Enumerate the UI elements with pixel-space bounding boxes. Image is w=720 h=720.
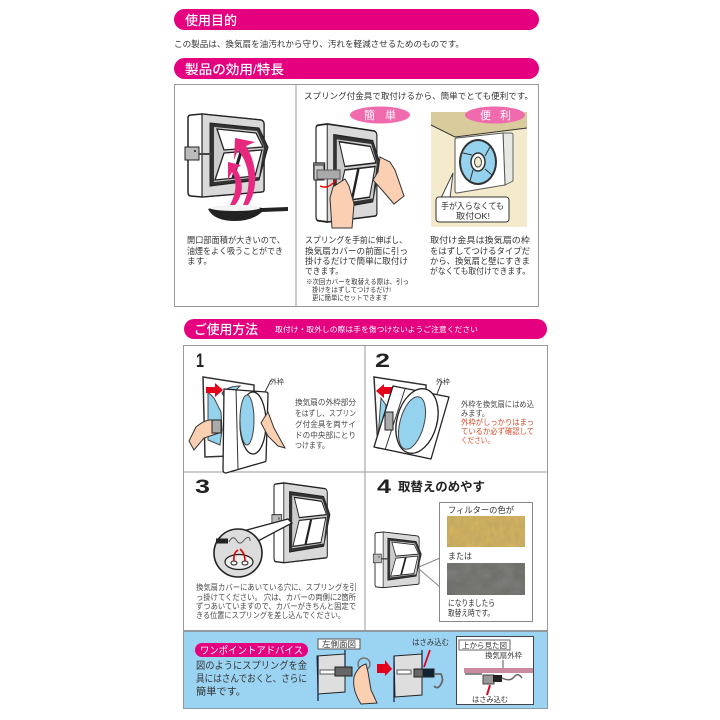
text: or: または	[448, 551, 472, 561]
panel: filter color guide	[440, 502, 532, 622]
icon: hood fan with rising smoke over a frying pan	[185, 114, 288, 221]
step 4	[373, 477, 532, 622]
label: outer frame: 外枠	[436, 377, 450, 386]
text: step 2 instruction: ください。	[461, 436, 494, 445]
text: easy caption: できます。	[305, 266, 343, 276]
text: step 3 instruction: っ掛けてください。 穴は、カバーの両側に2箇所	[196, 592, 356, 602]
step 2	[374, 351, 534, 459]
text: easy caption	[305, 234, 409, 302]
text: callout: 手が入らなくても	[441, 200, 504, 211]
illustration: fan hood with leader lines	[373, 532, 440, 588]
step 4 heading: 4	[377, 477, 392, 498]
text: replacement time	[448, 598, 495, 618]
badge: one-point advice: ワンポイントアドバイス	[200, 645, 303, 657]
label: left side view: 左側面図	[322, 639, 356, 649]
badge: easy: 簡単	[364, 108, 396, 122]
label: left side view	[318, 639, 360, 649]
text: filter color: フィルターの色が	[448, 504, 514, 515]
illustration: hooking the spring into the cover holes	[214, 483, 330, 577]
text: convenient caption: 取付け金具は換気扇の枠	[430, 234, 530, 245]
heading: effects and features	[174, 58, 539, 79]
heading: how to use	[184, 319, 547, 339]
heading: purpose: 使用目的	[185, 13, 237, 28]
text: step 2 instruction: みます。	[461, 409, 489, 418]
heading: how to use: ご使用方法	[194, 322, 258, 337]
text: easy caption: スプリングを手前に伸ばし、	[305, 234, 407, 245]
text: step 1 instruction: 換気扇の外枠部分	[295, 397, 356, 407]
text: replacement time: になりましたら	[448, 598, 495, 608]
text: opening area caption: 開口部面積が大きいので、	[187, 234, 285, 245]
illustration: right side view, spring clamped	[394, 650, 442, 702]
text: easy caption: 換気扇カバーの前面に引っ	[305, 245, 408, 256]
step number 3: 3	[195, 477, 210, 498]
text: convenient caption	[430, 234, 530, 276]
label: clamp: はさみ込む	[472, 695, 508, 704]
text: convenient caption: をはずしてつけるタイプだ	[430, 246, 530, 256]
step 1	[189, 351, 356, 473]
text: advice: 具にはさんでおくと、さらに	[196, 673, 307, 685]
step 4 heading: 取替えのめやす	[398, 479, 485, 494]
label: view from above: 上から見た図	[462, 641, 507, 650]
text: step 1 instruction: ドの中央部にとり	[295, 430, 356, 440]
text: convenient caption: がなくても取付けできます。	[430, 265, 530, 276]
step 3	[195, 477, 357, 620]
label: clamp: はさみ込む	[412, 638, 449, 647]
text: advice: 簡単です。	[196, 685, 246, 698]
text: step 1 instruction: グ付金具を両サイ	[295, 419, 356, 429]
illustration: fan mounted against the wall	[431, 112, 527, 227]
illustration: left side view, fingers placing spring	[317, 650, 377, 704]
text: step 2 instruction: 外枠がしっかりはまっ	[461, 417, 534, 427]
badge: convenient	[465, 106, 525, 124]
arrow: red right	[377, 660, 392, 676]
illustration: fitting the outer frame	[374, 377, 449, 459]
illustration: hands attaching the spring to the cover	[314, 124, 404, 228]
text: advice	[196, 659, 307, 698]
heading: effects and features: 製品の効用/特長	[185, 62, 284, 77]
text: purpose statement: この製品は、換気扇を油汚れから守り、汚れを軽減させるためのものです。	[174, 38, 464, 49]
heading: purpose	[174, 9, 539, 30]
text: step 1 instruction: つけます。	[295, 441, 329, 450]
illustration: attaching brackets to the frame	[189, 377, 285, 473]
label: outer frame: 外枠	[270, 377, 284, 386]
panel: usage steps grid	[184, 346, 548, 631]
step number 2: 2	[375, 351, 390, 372]
text: step 1 instruction: をはずし、スプリン	[295, 408, 356, 418]
text: callout: 取付OK!	[456, 211, 490, 221]
label: outer frame of fan: 換気扇外枠	[485, 651, 522, 660]
text: step 3 instruction	[196, 582, 357, 620]
badge: easy	[350, 106, 410, 124]
panel: effects and features	[174, 84, 538, 306]
text: step 3 instruction: きる位置にスプリングを差し込んでください。	[196, 610, 345, 620]
text: spring fitting headline: スプリング付金具で取付けるから、簡単でとても便利です。	[304, 90, 533, 101]
badge: convenient: 便利	[480, 109, 511, 122]
heading: how to use: 取付け・取外しの際は手を傷つけないようご注意ください	[275, 324, 478, 334]
text: opening area caption	[187, 234, 285, 266]
text: step 3 instruction: ずつあいていますので、カバーがきちんと固定で	[196, 601, 356, 611]
text: easy caption: 更に簡単にセットできます	[312, 293, 388, 302]
text: step 2 instruction: 外枠を換気扇にはめ込	[461, 399, 534, 409]
text: convenient caption: から、換気扇と壁にすきま	[430, 255, 530, 266]
text: step 1 instruction	[295, 397, 356, 450]
text: replacement time: 取替え時です。	[448, 607, 494, 618]
text: easy caption: 掛けるだけで簡単に取付け	[305, 255, 408, 266]
text: advice: 図のようにスプリングを金	[196, 659, 307, 672]
swatch: grey filter	[447, 563, 525, 595]
text: easy caption: 掛けをはずしてつけるだけ!	[312, 285, 391, 294]
text: opening area caption: 油煙をよく吸うことができ	[187, 245, 283, 256]
swatch: yellow filter	[447, 516, 525, 547]
step 4 heading	[377, 477, 485, 498]
panel: one-point advice	[184, 632, 548, 708]
text: step 3 instruction: 換気扇カバーにあいている穴に、スプリングを引	[196, 582, 357, 592]
step number 1: 1	[196, 351, 204, 372]
text: opening area caption: ます。	[187, 256, 212, 266]
panel: view from above	[456, 636, 534, 704]
text: easy caption: ※次回カバーを取替える際は、引っ	[306, 277, 409, 286]
text: step 2 instruction: ているか必ず確認して	[461, 426, 534, 436]
text: step 2 instruction	[461, 399, 534, 445]
text: callout	[441, 200, 504, 221]
